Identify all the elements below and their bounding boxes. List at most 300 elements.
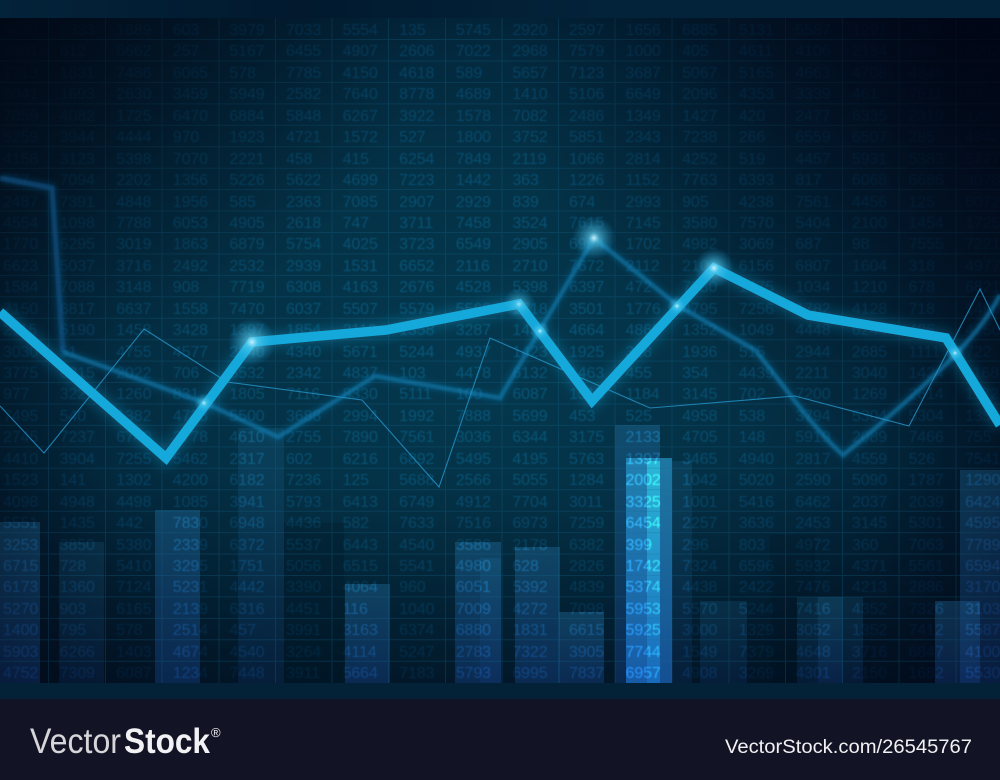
number table: 2566 [456, 472, 491, 489]
number table: 908 [173, 279, 199, 296]
number table: 5793 [286, 494, 321, 511]
image URL: VectorStock.com/26545767 [725, 737, 972, 758]
number table: 1693 [60, 86, 95, 103]
number table: 6295 [60, 236, 95, 253]
number table: 7098 [569, 601, 604, 618]
number table: 6884 [229, 108, 265, 125]
number table: 2886 [908, 579, 944, 596]
number table: 7837 [569, 665, 604, 682]
number table: 5495 [3, 22, 38, 39]
number table: 7541 [965, 451, 1000, 468]
number table: 322 [60, 386, 86, 403]
number table: 7611 [908, 86, 943, 103]
number table: 5532 [229, 365, 265, 382]
number table: 486 [908, 322, 935, 339]
bottom band [0, 683, 1000, 699]
number table: 7555 [908, 236, 944, 253]
logo: VectorStock: ® [211, 725, 221, 740]
number table: 7561 [399, 429, 434, 446]
number table: 4451 [286, 601, 321, 618]
number table: 6686 [908, 172, 944, 189]
number table: 6065 [173, 65, 208, 82]
number table: 4559 [852, 451, 887, 468]
number table: 4756 [965, 322, 1000, 339]
number table: 7145 [626, 215, 661, 232]
number table: 6948 [229, 515, 265, 532]
number table: 722 [965, 344, 992, 361]
number table: 2453 [795, 515, 831, 532]
number table: 266 [739, 129, 765, 146]
number table: 1356 [173, 172, 208, 189]
number table: 98 [852, 236, 870, 253]
number table: 3011 [569, 494, 603, 511]
number table: 4252 [682, 151, 717, 168]
number table: 2532 [229, 258, 265, 275]
number table: 6216 [343, 451, 378, 468]
number table: 6994 [569, 236, 604, 253]
number table: 5537 [286, 536, 321, 554]
number table: 1523 [3, 472, 38, 489]
number table: 7579 [569, 43, 604, 60]
number table: 540 [60, 408, 86, 425]
number table: 1040 [399, 601, 434, 618]
logo: VectorStock [30, 722, 221, 761]
number table: 803 [739, 536, 765, 554]
number table: 3052 [795, 622, 831, 639]
number table: 1269 [852, 386, 887, 403]
number table: 3123 [60, 151, 95, 168]
number table: 5410 [116, 558, 151, 575]
number table: 4610 [229, 429, 265, 446]
number table: 1435 [60, 515, 95, 532]
number table: 718 [908, 301, 935, 318]
number table: 4128 [852, 301, 887, 318]
number table: 7470 [229, 301, 265, 318]
number table: 6821 [965, 279, 1000, 296]
number table: 6454 [626, 515, 661, 532]
number table: 4618 [399, 65, 434, 82]
number table: 296 [682, 536, 709, 554]
number table: 1397 [626, 451, 661, 468]
number table: 5530 [965, 665, 1000, 682]
number table: 354 [682, 365, 709, 382]
number table: 2343 [626, 129, 661, 146]
number table: 5579 [399, 301, 434, 318]
number table: 1098 [60, 215, 95, 232]
number table: 7082 [512, 108, 548, 125]
number table: 1400 [3, 622, 38, 639]
number table: 1442 [456, 172, 491, 189]
number table: 7123 [569, 65, 604, 82]
number table: 2920 [512, 22, 548, 39]
number table: 2150 [852, 665, 887, 682]
number table: 6072 [965, 194, 1000, 210]
number table: 1702 [626, 236, 661, 253]
number table: 7009 [456, 601, 491, 618]
number table: 905 [682, 194, 709, 210]
number table: 4795 [682, 301, 717, 318]
number table: 6173 [3, 579, 38, 596]
number table: 525 [626, 408, 652, 425]
number table: 7022 [456, 43, 491, 60]
number table: 4839 [569, 579, 604, 596]
number table: 2178 [512, 536, 548, 554]
number table: 6413 [343, 494, 378, 511]
number table: 7830 [173, 515, 208, 532]
number table: 5259 [3, 129, 38, 146]
number table: 1515 [569, 386, 604, 403]
number table: 5067 [682, 65, 717, 82]
number table: 3687 [626, 65, 661, 82]
number table: 538 [739, 408, 765, 425]
number table: 5919 [795, 429, 831, 446]
number table: 7255 [116, 451, 151, 468]
number table: 7476 [795, 579, 831, 596]
number table: 2783 [456, 644, 491, 661]
number table: 4353 [739, 86, 774, 103]
number table: 6623 [3, 258, 38, 275]
number table: 6372 [229, 536, 265, 554]
number table: 5507 [343, 301, 378, 318]
number table: 6649 [626, 86, 661, 103]
number table: 6443 [343, 536, 378, 554]
number table: 6662 [116, 43, 151, 60]
number table: 3390 [286, 579, 321, 596]
number table: 2662 [965, 65, 1000, 82]
number table: 3716 [116, 258, 151, 275]
number table: 3269 [739, 665, 774, 682]
number table: 1992 [399, 408, 434, 425]
number table: 6507 [852, 129, 887, 146]
number table: 5622 [286, 172, 321, 189]
top band [0, 0, 1000, 18]
number table: 1782 [795, 301, 831, 318]
number table: 2342 [286, 365, 321, 382]
number table: 1226 [569, 172, 604, 189]
number table: 4595 [965, 515, 1000, 532]
number table: 4755 [116, 344, 151, 361]
number table: 135 [399, 22, 426, 39]
number table: 1770 [3, 236, 38, 253]
number table: 6244 [852, 322, 887, 339]
number table: 5551 [3, 515, 38, 532]
number table: 2139 [173, 601, 208, 618]
number table: 4977 [965, 258, 1000, 275]
number table: 2630 [116, 86, 151, 103]
number table: 7448 [229, 665, 265, 682]
number table: 103 [399, 365, 426, 382]
number table: 5932 [795, 558, 831, 575]
number table: 5671 [343, 344, 378, 361]
number table: 3078 [965, 172, 1000, 189]
number table: 1152 [626, 172, 660, 189]
number table: 7223 [399, 172, 434, 189]
number table: 582 [343, 515, 369, 532]
number table: 3145 [852, 515, 887, 532]
number table: 472 [626, 279, 652, 296]
number table: 3723 [399, 236, 434, 253]
number table: 3850 [60, 536, 95, 554]
number table: 1172 [965, 386, 999, 403]
number table: 7322 [512, 644, 548, 661]
number table: 1725 [116, 108, 151, 125]
number table: 1936 [682, 344, 717, 361]
number table: 7183 [399, 665, 434, 682]
number table: 3501 [569, 301, 604, 318]
number table: 1725 [965, 215, 1000, 232]
number table: 3103 [965, 601, 1000, 618]
number table: 420 [739, 108, 765, 125]
number table: 5404 [795, 215, 831, 232]
number table: 2317 [229, 451, 265, 468]
number table: 3688 [286, 408, 321, 425]
number table: 5495 [456, 451, 491, 468]
number table: 7391 [60, 194, 95, 210]
number table: 4663 [795, 65, 831, 82]
number table: 7789 [965, 536, 1000, 554]
number table: 2590 [795, 472, 831, 489]
number table: 1713 [3, 65, 38, 82]
number table: 6132 [512, 365, 548, 382]
number table: 6847 [908, 644, 944, 661]
number table: 125 [343, 472, 369, 489]
number table: 7561 [795, 194, 831, 210]
number table: 2039 [908, 494, 944, 511]
number table: 2422 [739, 579, 774, 596]
number table: 5657 [512, 65, 548, 82]
number table: 5304 [852, 408, 887, 425]
number table: 7088 [60, 279, 95, 296]
number table: 3041 [3, 86, 38, 103]
number table: 628 [908, 43, 935, 60]
number table: 5554 [343, 22, 378, 39]
number table: 2257 [682, 515, 717, 532]
number table: 1284 [569, 472, 604, 489]
number table: 6637 [116, 301, 151, 318]
number table: 4448 [795, 322, 831, 339]
number table: 7849 [456, 151, 491, 168]
number table: 7630 [682, 279, 717, 296]
number table: 4371 [852, 558, 887, 575]
number table: 2115 [3, 322, 37, 339]
number table: 4980 [456, 558, 491, 575]
number table: 4106 [795, 43, 831, 60]
number table: 3163 [343, 622, 378, 639]
number table: 7704 [512, 494, 548, 511]
number table: 2096 [682, 86, 717, 103]
number table: 1234 [173, 665, 208, 682]
number table: 977 [3, 386, 29, 403]
number table: 1923 [229, 129, 265, 146]
number table: 4837 [343, 365, 378, 382]
number table: 3030 [3, 344, 38, 361]
number table: 6957 [626, 665, 661, 682]
number table: 5226 [229, 172, 265, 189]
number table: 1572 [343, 129, 378, 146]
number table: 6374 [399, 622, 434, 639]
number table: 4272 [512, 601, 548, 618]
number table: 6424 [965, 494, 1000, 511]
number table: 5587 [795, 22, 831, 39]
number table: 5848 [286, 108, 321, 125]
number table: 6393 [739, 172, 774, 189]
number table: 2002 [626, 472, 661, 489]
number table: 2363 [286, 194, 321, 210]
number table: 755 [965, 429, 992, 446]
number table: 6397 [569, 279, 604, 296]
number table: 7256 [739, 301, 774, 318]
number table: 795 [60, 622, 86, 639]
number table: 7221 [965, 236, 1000, 253]
number table: 1184 [626, 386, 660, 403]
number table: 4699 [343, 172, 378, 189]
number table: 5020 [739, 472, 774, 489]
number table: 2929 [456, 194, 491, 210]
number table: 6892 [399, 451, 434, 468]
number table: 3580 [682, 215, 717, 232]
number table: 3145 [682, 386, 717, 403]
number table: 6749 [399, 494, 434, 511]
number table: 1403 [116, 644, 151, 661]
number table: 4912 [456, 494, 491, 511]
number table: 515 [739, 344, 765, 361]
number table: 4301 [795, 665, 831, 682]
number table: 4098 [3, 494, 38, 511]
number table: 458 [286, 151, 312, 168]
number table: 3019 [116, 236, 151, 253]
number table: 2487 [3, 194, 38, 210]
number table: 2939 [286, 258, 321, 275]
number table: 674 [569, 194, 595, 210]
number table: 2492 [173, 258, 208, 275]
number table: 2745 [3, 429, 38, 446]
number table: 706 [173, 365, 199, 382]
number table: 4439 [739, 365, 774, 382]
number table: 1000 [626, 43, 661, 60]
number table: 3911 [286, 665, 320, 682]
number table: 135 [965, 408, 992, 425]
number table: 4738 [173, 408, 208, 425]
number table: 4213 [852, 579, 887, 596]
number table: 1549 [682, 644, 717, 661]
number table: 4438 [682, 579, 717, 596]
number table: 4456 [852, 194, 887, 210]
number table: 2100 [682, 258, 717, 275]
number table: 3459 [173, 86, 208, 103]
number table: 7633 [399, 515, 434, 532]
number table: 3778 [173, 429, 208, 446]
number table: 6308 [286, 279, 321, 296]
number table: 7094 [60, 172, 95, 189]
number table: 2597 [569, 22, 604, 39]
number table: 2817 [795, 451, 831, 468]
number table: 4064 [343, 579, 378, 596]
number table: 1349 [626, 108, 661, 125]
number table: 2211 [795, 365, 829, 382]
number table: 970 [173, 129, 199, 146]
number table: 6254 [399, 151, 434, 168]
number table: 6462 [795, 494, 831, 511]
number table: 747 [343, 215, 369, 232]
number table: 1066 [569, 151, 604, 168]
number table: 4540 [399, 536, 434, 554]
number table: 442 [116, 515, 143, 532]
number table: 3794 [795, 408, 831, 425]
number table: 6652 [399, 258, 434, 275]
number table: 5851 [569, 129, 604, 146]
number table: 2907 [399, 194, 434, 210]
number table: 5953 [626, 601, 661, 618]
number table: 1490 [965, 301, 1000, 318]
number table: 2119 [512, 151, 546, 168]
number table: 3175 [569, 429, 604, 446]
number table: 1352 [682, 322, 717, 339]
number table: 3514 [965, 22, 1000, 39]
number table: 2618 [286, 215, 321, 232]
number table: 4346 [908, 65, 944, 82]
number table: 3325 [626, 494, 661, 511]
number table: 5301 [908, 515, 944, 532]
number table: 7085 [343, 194, 378, 210]
number table: 148 [739, 429, 765, 446]
number table: 1382 [116, 408, 151, 425]
number table: 3148 [116, 279, 151, 296]
number table: 1352 [852, 622, 887, 639]
number table: 1458 [116, 322, 151, 339]
number table: 578 [116, 622, 143, 639]
number table: 4752 [3, 665, 38, 682]
number table: 4689 [456, 86, 491, 103]
number table: 5949 [229, 86, 265, 103]
number table: 1656 [626, 22, 661, 39]
number table: 1805 [229, 386, 265, 403]
number table: 5925 [626, 622, 661, 639]
number table: 4498 [116, 494, 151, 511]
number table: 5763 [569, 451, 604, 468]
main line [0, 268, 1000, 458]
number table: 3944 [60, 129, 95, 146]
number table: 1531 [343, 258, 378, 275]
number table: 1168 [965, 365, 999, 382]
glow points [194, 216, 964, 413]
number table: 7236 [286, 472, 321, 489]
number table: 7672 [569, 258, 604, 275]
number table: 2685 [852, 344, 887, 361]
number table: 6316 [229, 601, 265, 618]
number table: 7495 [3, 408, 38, 425]
number table: 5055 [512, 472, 548, 489]
number table: 5165 [739, 65, 774, 82]
number table: 1034 [795, 279, 831, 296]
number table: 7466 [908, 429, 944, 446]
number table: 527 [399, 129, 426, 146]
number table: 3941 [229, 494, 265, 511]
number table: 2184 [852, 43, 887, 60]
number table: 3711 [399, 215, 433, 232]
number table: 7458 [456, 215, 491, 232]
number table: 1423 [512, 344, 548, 361]
number table: 4611 [739, 43, 773, 60]
number table: 5167 [229, 43, 265, 60]
number table: 2606 [399, 43, 434, 60]
number table: 2826 [569, 558, 604, 575]
number table: 1689 [116, 22, 151, 39]
number table: 2089 [852, 429, 887, 446]
number table: 4410 [3, 451, 38, 468]
number table: 4436 [286, 515, 321, 532]
number table: 3339 [795, 86, 831, 103]
number table: 51 [60, 344, 77, 361]
